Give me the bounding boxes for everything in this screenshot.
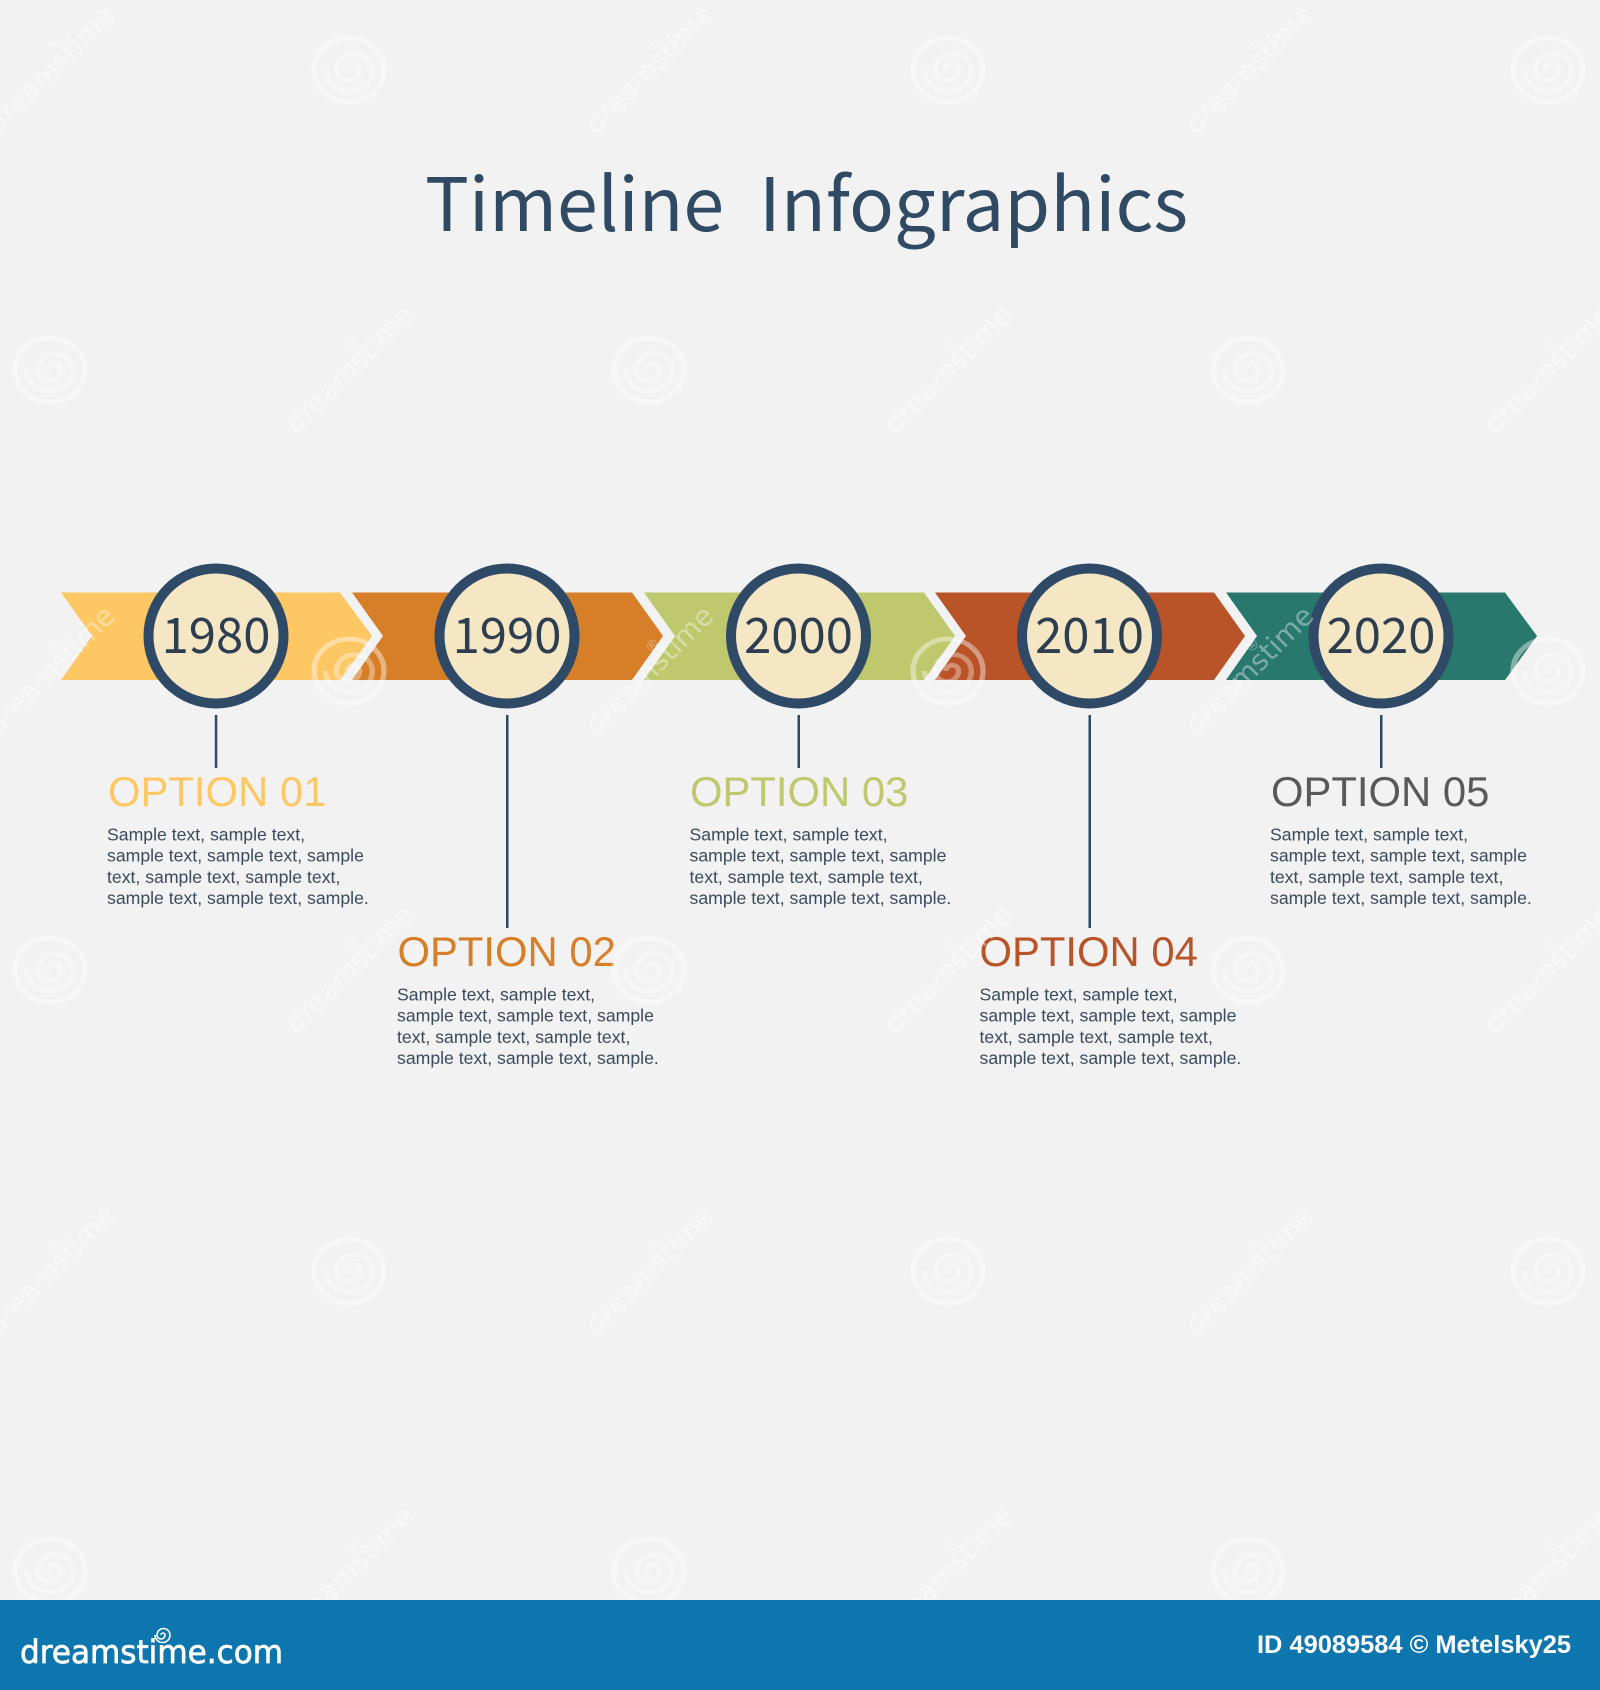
title: Infographics	[759, 146, 1188, 253]
watermark layer: time	[53, 1199, 121, 1267]
watermark layer: ®	[43, 1235, 65, 1257]
watermark layer: time	[652, 1199, 720, 1267]
option 01: Sample text, sample text,	[107, 824, 305, 844]
watermark layer: ®	[1242, 1235, 1264, 1257]
option 04: sample text, sample text, sample.	[980, 1048, 1241, 1068]
watermark layer: dreams	[278, 1544, 376, 1641]
watermark layer: dreams	[1477, 943, 1575, 1040]
watermark layer: dreams	[278, 343, 376, 440]
option 02: sample text, sample text, sample.	[397, 1048, 659, 1068]
watermark layer: ®	[642, 34, 664, 56]
option 01: text, sample text, sample text,	[107, 867, 340, 887]
watermark layer: time	[352, 1499, 420, 1567]
watermark layer: ®	[642, 1235, 664, 1257]
year marker 1980	[148, 568, 284, 704]
footer logo: dreamstime.com	[20, 1633, 283, 1671]
year marker 2000: 2000	[744, 597, 853, 668]
option 01: OPTION 01	[108, 768, 326, 815]
watermark layer: time	[652, 599, 720, 667]
watermark layer: time	[53, 0, 121, 66]
option 05: OPTION 05	[1271, 768, 1489, 815]
option 04	[980, 715, 1241, 1068]
option 05: text, sample text, sample text,	[1270, 867, 1503, 887]
title: Timeline	[425, 146, 724, 253]
watermark layer: dreams	[1178, 1244, 1276, 1341]
watermark layer: dreams	[278, 943, 376, 1040]
watermark layer: dreams	[1477, 343, 1575, 440]
watermark layer: dreams	[1178, 644, 1276, 741]
year marker 2020: 2020	[1327, 597, 1435, 668]
watermark layer: time	[951, 898, 1019, 966]
option 02: text, sample text, sample text,	[397, 1027, 630, 1047]
option 05: Sample text, sample text,	[1270, 824, 1468, 844]
watermark layer: ®	[1242, 635, 1264, 657]
arrow segment 2	[352, 592, 663, 680]
option 04: OPTION 04	[980, 928, 1198, 975]
watermark layer: time	[53, 599, 121, 667]
option 03	[690, 715, 951, 908]
watermark layer: ®	[43, 34, 65, 56]
footer credit: ID 49089584 © Metelsky25	[1257, 1631, 1571, 1659]
watermark layer: ®	[941, 334, 963, 356]
option 01: sample text, sample text, sample.	[107, 888, 369, 908]
watermark layer: dreams	[578, 644, 676, 741]
title	[425, 146, 1188, 253]
year marker 2020	[1314, 568, 1448, 704]
watermark layer: ®	[1541, 934, 1563, 956]
watermark layer: time	[352, 898, 420, 966]
watermark layer: ®	[43, 635, 65, 657]
watermark layer: time	[1252, 1199, 1320, 1267]
option 03: Sample text, sample text,	[690, 824, 888, 844]
option 02: Sample text, sample text,	[397, 984, 595, 1004]
watermark layer: time	[1252, 0, 1320, 66]
option 03: OPTION 03	[690, 768, 908, 815]
option 05: sample text, sample text, sample	[1270, 846, 1527, 866]
watermark layer: time	[1252, 599, 1320, 667]
year marker 1980: 1980	[162, 597, 270, 668]
year marker 2000	[731, 568, 866, 704]
watermark layer: ®	[1541, 1535, 1563, 1557]
watermark layer: time	[951, 298, 1019, 366]
watermark layer: ®	[941, 934, 963, 956]
arrow segment 5	[1226, 592, 1537, 680]
footer bar	[0, 1600, 1600, 1690]
arrow segment 3	[644, 592, 955, 680]
option 04: sample text, sample text, sample	[980, 1006, 1237, 1026]
option 04: Sample text, sample text,	[980, 984, 1178, 1004]
watermark layer: ®	[342, 934, 364, 956]
watermark layer: ®	[642, 635, 664, 657]
year marker 2010	[1022, 568, 1157, 704]
watermark layer: time	[352, 298, 420, 366]
watermark layer: dreams	[877, 1544, 975, 1641]
watermark layer: time	[951, 1499, 1019, 1567]
watermark layer: ®	[1541, 334, 1563, 356]
option 01	[107, 715, 369, 908]
year marker 1990	[440, 568, 574, 704]
option 02: OPTION 02	[398, 928, 616, 975]
watermark layer: dreams	[1477, 1544, 1575, 1641]
option 03: sample text, sample text, sample.	[690, 888, 951, 908]
watermark layer: ®	[342, 334, 364, 356]
watermark layer: dreams	[1178, 43, 1276, 140]
arrow segment 4	[935, 592, 1245, 680]
arrow segment 1	[61, 592, 372, 680]
option 03: sample text, sample text, sample	[690, 846, 947, 866]
option 02	[397, 715, 659, 1068]
option 05: sample text, sample text, sample.	[1270, 888, 1532, 908]
option 05	[1270, 715, 1532, 908]
option 02: sample text, sample text, sample	[397, 1006, 654, 1026]
watermark layer: ®	[1242, 34, 1264, 56]
option 03: text, sample text, sample text,	[690, 867, 923, 887]
watermark layer: dreams	[877, 343, 975, 440]
year marker 1990: 1990	[453, 597, 561, 668]
timeline arrow band	[61, 592, 1537, 680]
watermark layer: ®	[941, 1535, 963, 1557]
watermark layer: dreams	[877, 943, 975, 1040]
watermark layer: dreams	[578, 43, 676, 140]
option 01: sample text, sample text, sample	[107, 846, 364, 866]
year marker 2010: 2010	[1035, 597, 1144, 668]
watermark layer: time	[652, 0, 720, 66]
watermark layer: dreams	[578, 1244, 676, 1341]
watermark layer: ®	[342, 1535, 364, 1557]
option 04: text, sample text, sample text,	[980, 1027, 1213, 1047]
